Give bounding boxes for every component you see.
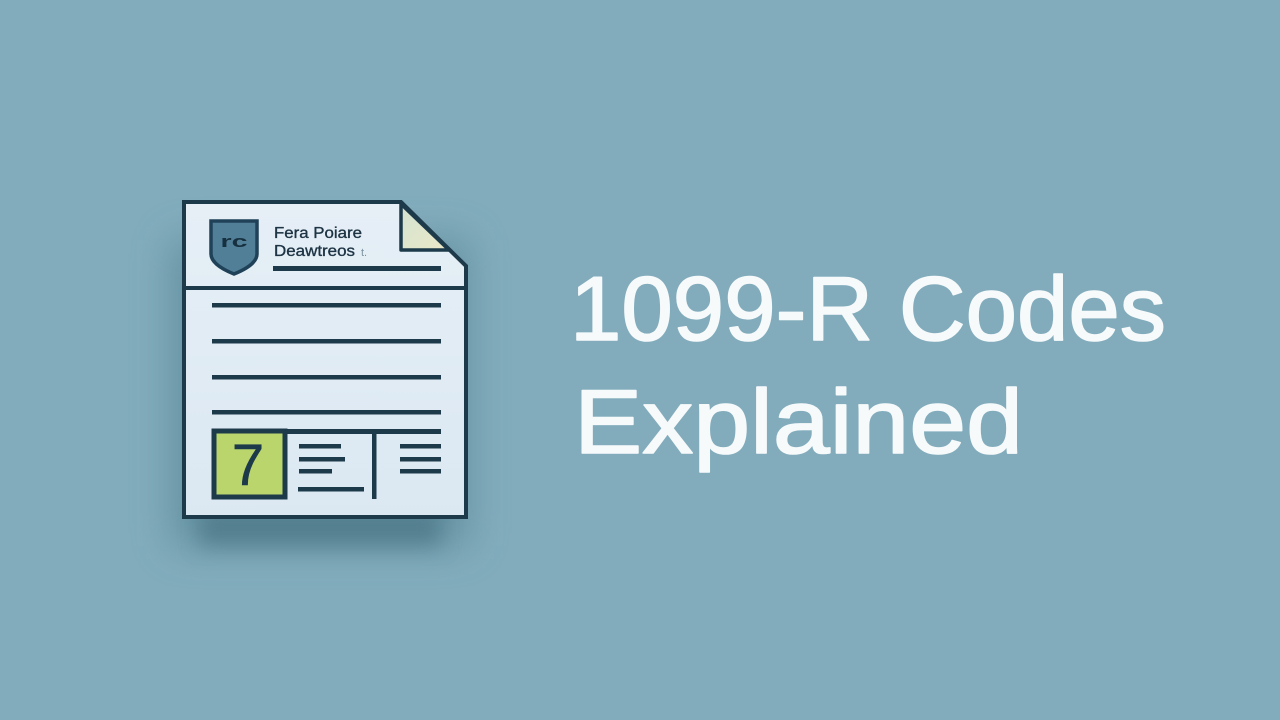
document shadow [172, 240, 468, 546]
title: 1099-R Codes [570, 259, 1166, 360]
folded corner [401, 204, 449, 250]
header divider [186, 286, 464, 290]
form header text: t. [361, 247, 367, 259]
header rule [273, 266, 441, 271]
form header text: Deawtreos [274, 243, 355, 260]
icon: shield badge [211, 221, 257, 274]
title: Explained [574, 372, 1023, 473]
code box row [212, 429, 441, 499]
title [570, 259, 1166, 473]
form body lines [212, 303, 441, 414]
document page [184, 202, 466, 517]
icon: tax form document [184, 202, 466, 517]
left text lines [298, 444, 364, 492]
right text lines [400, 444, 441, 474]
form header text: Fera Poiare [274, 225, 362, 242]
form header text [274, 225, 367, 260]
code 7 box: 7 [232, 433, 264, 498]
code 7 box [214, 431, 285, 498]
row top rule [212, 429, 441, 434]
icon: shield badge: rc [220, 232, 248, 251]
vertical divider [372, 432, 376, 499]
